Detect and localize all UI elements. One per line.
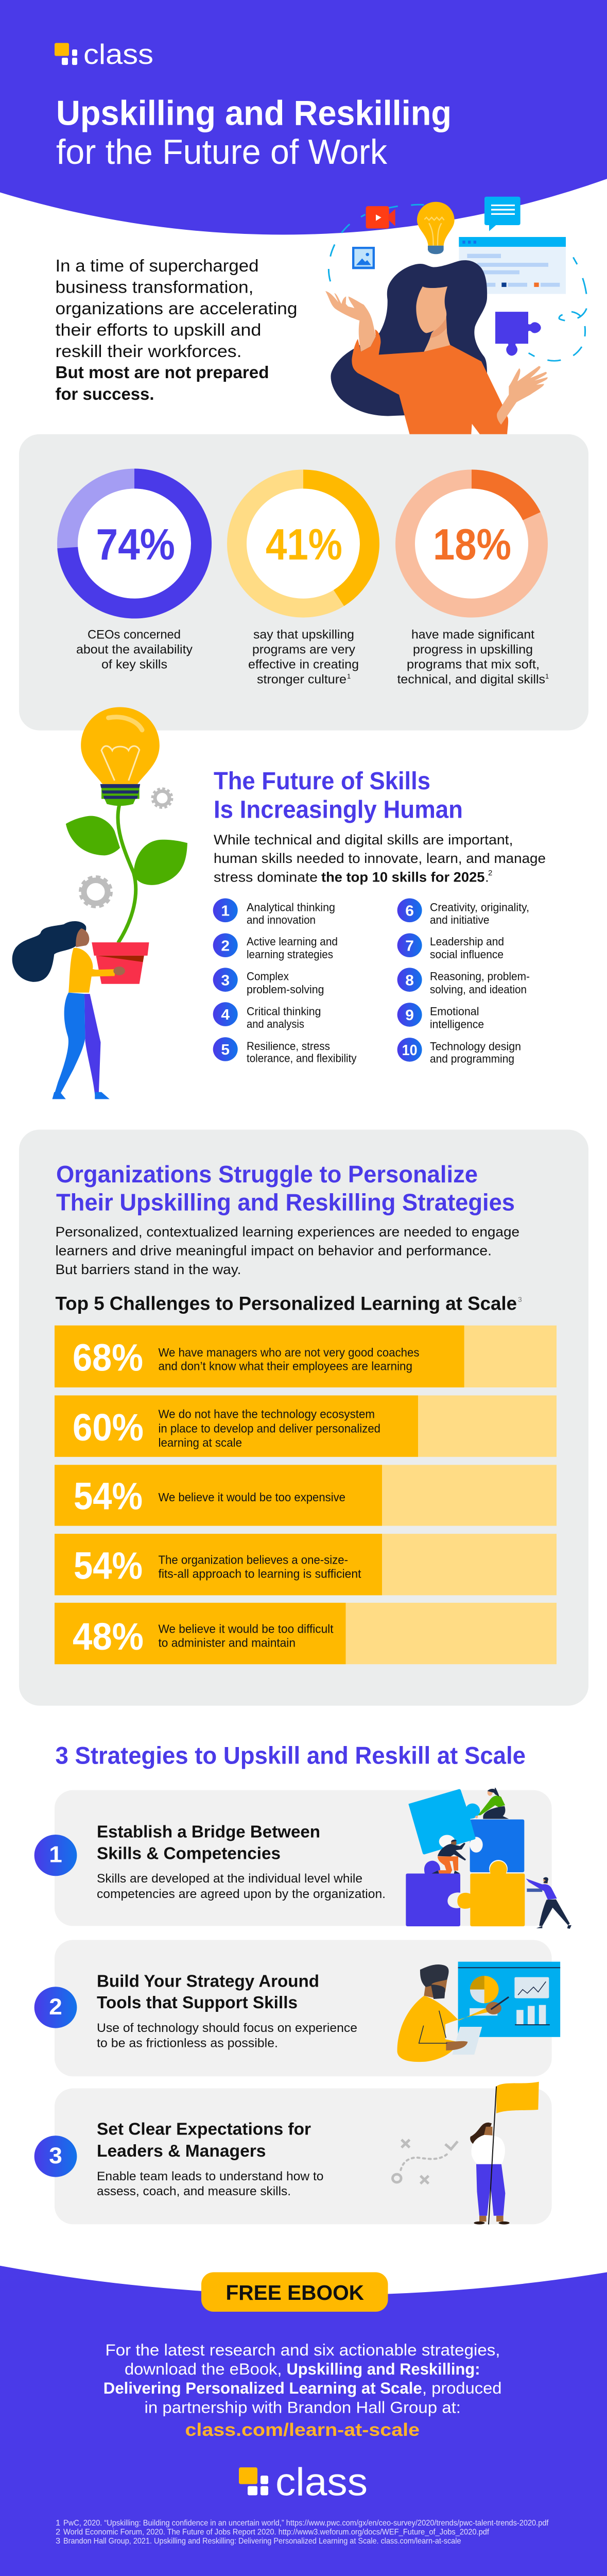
card: strategy 3 — [34, 2082, 552, 2225]
skill 2 — [213, 933, 338, 961]
icon: small gear — [152, 789, 172, 808]
illustration: man presenting charts — [397, 1962, 560, 2062]
bar: 48%: 48% — [73, 1615, 144, 1658]
paragraph: human skills: the top 10 skills for 2025 — [321, 869, 485, 885]
caption: 41%: programs are very — [252, 643, 356, 656]
intro text: In a time of supercharged — [56, 257, 259, 276]
number badge 1 — [34, 1835, 77, 1876]
strategy 2 text: Build Your Strategy Around — [97, 1972, 319, 1991]
caption: 74%: CEOs concerned — [88, 628, 181, 641]
skill 4: 4 — [221, 1007, 230, 1023]
title — [56, 93, 452, 172]
footnotes: 1 — [56, 2518, 60, 2528]
skill 6: and initiative — [430, 913, 489, 926]
skill 1: 1 — [221, 903, 230, 919]
call to action text: class.com/learn-at-scale — [185, 2419, 420, 2440]
title: Upskilling and Reskilling — [56, 93, 452, 132]
bar: 54% one-size-fits-all: fits-all approach to learning is sufficient — [159, 1568, 361, 1581]
bar: 48% — [55, 1603, 557, 1664]
paragraph: human skills: 2 — [488, 869, 492, 877]
bar: 60%: in place to develop and deliver personalized — [159, 1422, 380, 1436]
title: for the Future of Work — [56, 132, 388, 172]
caption: 74%: about the availability — [76, 643, 193, 656]
footnotes: 3 — [56, 2536, 60, 2546]
plant and figure — [12, 707, 187, 1099]
skill 10: and programming — [430, 1052, 514, 1065]
paragraph: human skills: . — [485, 869, 489, 885]
illustration: people building a puzzle — [406, 1788, 571, 1929]
intro text — [56, 257, 298, 404]
bar: 68% — [55, 1326, 557, 1387]
skill 10 — [397, 1038, 521, 1065]
heading: future of skills: The Future of Skills — [214, 767, 430, 795]
skill 7: social influence — [430, 947, 504, 961]
heading: 3 strategies: 3 Strategies to Upskill and Reskill at Scale — [56, 1742, 526, 1770]
skill 6 — [397, 899, 529, 926]
button: free ebook: FREE EBOOK — [226, 2281, 364, 2304]
caption: 18%: have made significant — [411, 628, 534, 641]
skill 10: Technology design — [430, 1040, 521, 1053]
heading: organizations struggle: Organizations Struggle to Personalize — [56, 1161, 478, 1188]
strategy 2 text: Use of technology should focus on experience — [97, 2021, 357, 2035]
paragraph: human skills: human skills needed to innovate, learn, and manage — [214, 851, 546, 866]
number badge 2: 2 — [49, 1994, 62, 2020]
subheading: top 5 challenges: Top 5 Challenges to Personalized Learning at Scale — [56, 1293, 517, 1314]
illustration: woman juggling learning icons — [325, 197, 586, 436]
skill 5: tolerance, and flexibility — [247, 1052, 357, 1065]
skill 1 — [213, 899, 335, 926]
skill 6: 6 — [405, 903, 414, 919]
footnotes: 2 — [56, 2528, 60, 2536]
footnotes: World Economic Forum, 2020. The Future of Jobs Report 2020. http://www3.weforum.org/docs/WEF_Future_of_Jobs_2020.pdf — [63, 2528, 489, 2536]
donut: 74% — [67, 479, 201, 608]
panel: personalization challenges — [19, 1130, 588, 1706]
intro text: their efforts to upskill and — [56, 321, 262, 340]
panel: key statistics — [19, 434, 588, 731]
icon: large gear — [80, 877, 111, 907]
skill 3: Complex — [247, 970, 289, 983]
skill 2: learning strategies — [247, 947, 333, 961]
caption: 18% — [397, 628, 549, 687]
skill 6: Creativity, originality, — [430, 901, 529, 913]
footnotes: PwC, 2020. “Upskilling: Building confidence in an uncertain world,” https://www.pwc.com/gx/en/ceo-survey/2020/trends/pwc-talent-trends-2020.pdf — [63, 2518, 549, 2528]
icon: light bulb — [417, 202, 455, 254]
number badge 2 — [34, 1987, 77, 2028]
bar: 60% — [55, 1395, 557, 1457]
paragraph: human skills — [214, 832, 546, 885]
button: free ebook — [201, 2272, 388, 2312]
logo: class footer: class — [275, 2460, 368, 2504]
strategy 3 text: Enable team leads to understand how to — [97, 2170, 324, 2183]
logo: class — [55, 39, 153, 70]
heading: organizations struggle — [56, 1161, 515, 1216]
intro text: business transformation, — [56, 278, 253, 297]
skill 3: problem-solving — [247, 982, 324, 996]
bar: 54% one-size-fits-all: The organization believes a one-size- — [159, 1554, 348, 1567]
bar: 48%: to administer and maintain — [159, 1637, 296, 1650]
paragraph: barriers: Personalized, contextualized learning experiences are needed to engage — [56, 1224, 519, 1240]
skill 8: Reasoning, problem- — [430, 970, 530, 983]
heading: organizations struggle: Their Upskilling and Reskilling Strategies — [56, 1189, 515, 1216]
bar: 68%: and don’t know what their employees are learning — [159, 1360, 412, 1373]
bar: 68%: We have managers who are not very good coaches — [159, 1346, 419, 1360]
card: strategy 2 — [34, 1940, 560, 2076]
card: strategy 1 — [34, 1788, 571, 1929]
strategy 3 text: Set Clear Expectations for — [97, 2120, 311, 2139]
strategy 3 text — [97, 2120, 324, 2198]
strategy 1 text: Establish a Bridge Between — [97, 1823, 320, 1842]
intro text: reskill their workforces. — [56, 342, 242, 361]
skill 8 — [397, 968, 530, 996]
caption: 74%: of key skills — [101, 658, 167, 671]
call to action text: For the latest research and six actionable strategies, — [106, 2341, 500, 2359]
bar: 60%: learning at scale — [159, 1436, 242, 1450]
strategy 1 text: Skills & Competencies — [97, 1844, 281, 1863]
icon: browser window — [459, 237, 566, 294]
paragraph: barriers: learners and drive meaningful impact on behavior and performance. — [56, 1243, 492, 1258]
bar: 68%: 68% — [73, 1336, 143, 1379]
bar: 54% one-size-fits-all: 54% — [74, 1544, 143, 1587]
skill 2: Active learning and — [247, 935, 338, 948]
skill 7: Leadership and — [430, 935, 504, 948]
bar: 60%: 60% — [73, 1406, 144, 1449]
bar: 54% expensive — [55, 1465, 557, 1526]
call to action text: download the eBook, — [125, 2360, 282, 2378]
call to action text: Delivering Personalized Learning at Scale — [103, 2379, 422, 2397]
caption: 41%: 1 — [347, 672, 351, 680]
skill 1: and innovation — [247, 913, 316, 926]
paragraph: barriers — [56, 1224, 519, 1277]
strategy 3 text: assess, coach, and measure skills. — [97, 2184, 291, 2198]
call to action text: , produced — [422, 2379, 502, 2397]
intro text: But most are not prepared — [56, 364, 269, 382]
heading: future of skills: Is Increasingly Human — [214, 795, 463, 823]
skill 9: Emotional — [430, 1005, 479, 1018]
bar: 48%: We believe it would be too difficult — [159, 1623, 334, 1636]
strategy 1 text: Skills are developed at the individual level while — [97, 1872, 362, 1886]
caption: 41%: effective in creating — [248, 658, 359, 671]
skill 8: solving, and ideation — [430, 982, 527, 996]
bar: 60%: We do not have the technology ecosystem — [159, 1408, 375, 1421]
bar: 54% expensive: We believe it would be too expensive — [159, 1491, 345, 1504]
call to action text — [103, 2341, 502, 2440]
icon: video camera — [366, 206, 395, 228]
footnotes — [56, 2518, 549, 2546]
strategy 1 text: competencies are agreed upon by the organization. — [97, 1887, 386, 1901]
caption: 18%: technical, and digital skills — [397, 673, 545, 687]
bar: 54% expensive: 54% — [74, 1475, 143, 1518]
footnotes: Brandon Hall Group, 2021. Upskilling and Reskilling: Delivering Personalized Learning at Scale. class.com/learn-at-scale — [63, 2536, 461, 2546]
bar: 54% one-size-fits-all — [55, 1534, 557, 1595]
list: top 10 skills — [213, 899, 530, 1065]
icon: puzzle piece — [495, 312, 541, 355]
caption: 18%: progress in upskilling — [413, 643, 533, 656]
caption: 18%: 1 — [545, 672, 549, 680]
skill 7: 7 — [405, 938, 414, 954]
donut: 18% — [405, 479, 538, 608]
call to action text: Upskilling and Reskilling: — [287, 2360, 480, 2378]
skill 4: Critical thinking — [247, 1005, 321, 1018]
hero banner background — [0, 0, 607, 234]
donut: 41% — [237, 479, 370, 608]
intro text: for success. — [56, 385, 154, 404]
donut: 74%: 74% — [96, 520, 175, 569]
strategy 2 text: to be as frictionless as possible. — [97, 2037, 278, 2050]
strategy 2 text — [97, 1972, 357, 2050]
skill 5: 5 — [221, 1042, 230, 1058]
skill 9 — [397, 1003, 484, 1031]
skill 8: 8 — [405, 972, 414, 989]
skill 3: 3 — [221, 972, 230, 989]
subheading: top 5 challenges: 3 — [518, 1296, 522, 1303]
skill 7 — [397, 933, 504, 961]
caption: 41% — [248, 628, 359, 687]
number badge 3: 3 — [49, 2143, 62, 2168]
strategy 1 text — [97, 1823, 386, 1901]
caption: 41%: say that upskilling — [253, 628, 354, 641]
donut: 18%: 18% — [433, 520, 511, 569]
skill 5 — [213, 1037, 357, 1065]
skill 9: 9 — [405, 1007, 414, 1024]
skill 2: 2 — [221, 938, 230, 954]
donut: 41%: 41% — [266, 520, 342, 569]
icon: image — [352, 247, 375, 269]
strategy 3 text: Leaders & Managers — [97, 2142, 266, 2161]
caption: 18%: programs that mix soft, — [407, 658, 540, 671]
footer background — [0, 2266, 607, 2576]
skill 4: and analysis — [247, 1017, 304, 1030]
heading: future of skills — [214, 767, 463, 823]
paragraph: human skills: stress dominate — [214, 869, 318, 885]
skill 5: Resilience, stress — [247, 1039, 330, 1053]
intro text: organizations are accelerating — [56, 299, 298, 318]
skill 9: intelligence — [430, 1018, 484, 1031]
logo: class: class — [83, 39, 153, 70]
icon: dashed orbit — [328, 205, 586, 361]
illustration: woman holding flag — [393, 2082, 539, 2225]
skill 1: Analytical thinking — [247, 901, 335, 913]
number badge 1: 1 — [49, 1841, 62, 1868]
skill 4 — [213, 1002, 321, 1030]
paragraph: human skills: While technical and digital skills are important, — [214, 832, 513, 848]
strategy 2 text: Tools that Support Skills — [97, 1993, 298, 2012]
caption: 74% — [76, 628, 193, 671]
skill 3 — [213, 968, 324, 996]
icon: chat bubble — [484, 197, 521, 231]
skill 10: 10 — [402, 1042, 418, 1059]
call to action text: in partnership with Brandon Hall Group at: — [145, 2398, 461, 2416]
paragraph: barriers: But barriers stand in the way. — [56, 1261, 241, 1277]
number badge 3 — [34, 2136, 77, 2177]
woman figure — [325, 260, 548, 436]
illustration: woman holding a light bulb plant — [12, 707, 187, 1099]
caption: 41%: stronger culture — [257, 673, 346, 687]
